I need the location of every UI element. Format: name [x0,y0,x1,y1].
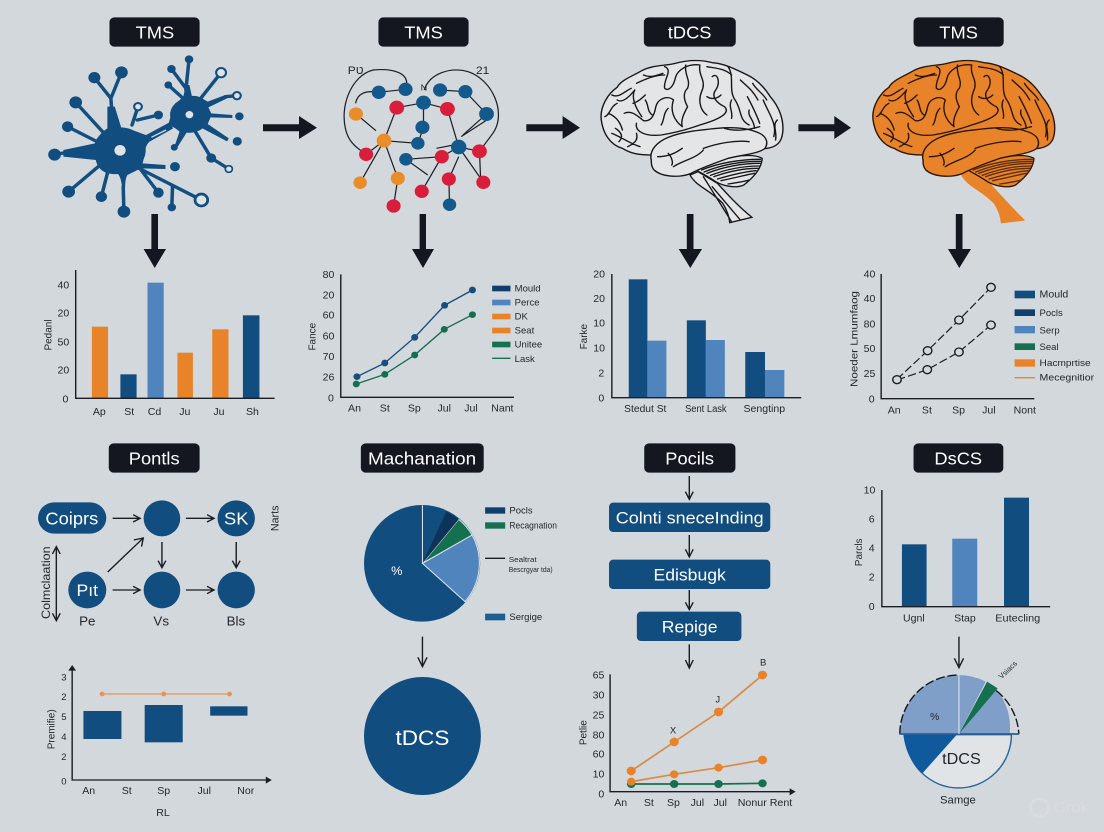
bar chart 6: 0 [869,602,875,613]
flow diagram: SK [224,509,249,529]
bar chart 3: Sengtinp [744,404,785,415]
line chart 4: Nont [1014,406,1036,416]
arrow: bars to pie [954,637,964,668]
flow diagram: Pe [79,614,95,628]
heading: TMS 2: TMS [404,23,443,43]
flow diagram [38,500,282,628]
bar chart 3: 20 [593,294,605,305]
bar chart 1: Ju [213,407,225,418]
arrow: right 1 [263,116,317,139]
chart: floating bars with line: 3 [61,673,67,683]
watermark: Grok: Grok [1054,800,1089,817]
line chart 4: St [922,406,932,416]
line chart 4: 50 [864,344,876,355]
chart: floating bars with line: Jul [197,786,211,797]
arrow: pie to circle [418,637,427,667]
line chart 2: 26 [323,373,335,384]
line chart 5: B [760,658,766,668]
bar chart 3: Farke [579,324,590,349]
line chart 5: Jul [714,798,727,809]
circle: tDCS: tDCS [396,726,449,750]
legend: Hacmprtise [1040,358,1091,368]
heading: Pontls [109,443,200,473]
arrow: down 2 [412,214,434,268]
flow: stacked boxes [609,476,770,668]
icon: orange brain [873,60,1055,223]
bar chart 1: St [124,407,134,418]
bar chart 1: 20 [58,309,70,320]
bar chart 6: Eutecling [995,614,1041,625]
pie chart: half segmented: % [930,712,939,723]
bar chart 3: 10 [593,319,605,330]
bar chart 6: Ugnl [903,614,925,625]
line chart 4: Noeder Lmumfaog [849,291,861,387]
line chart 2: 60 [323,311,335,322]
legend: Pocls [509,506,533,515]
line chart 2 [307,270,542,415]
line chart 4 [849,270,1094,416]
arrow: right 2 [526,116,580,139]
diagram: node network [344,64,498,213]
line chart 5: An [614,798,627,809]
bar chart 1: 20 [58,366,70,376]
line chart 5: 0 [598,790,605,800]
diagram: node network: Pט [348,64,364,77]
line chart 2: 60 [323,332,335,342]
heading: TMS 1: TMS [136,23,174,43]
line chart 5: 60 [593,750,605,761]
bar chart 3 [579,270,801,415]
line chart 5: J [715,695,720,704]
legend: Bescrgyar tda) [509,565,553,574]
line chart 5: Jul [691,798,704,809]
flow: stacked boxes: Edisbugk [653,565,726,585]
legend: Serp [1040,326,1060,335]
line chart 4: Jul [982,406,996,416]
legend: Sergige [509,612,542,622]
bar chart 1: Sh [246,407,259,418]
diagram: node network: Ν [421,83,427,93]
panel: middle left charts [43,270,542,418]
icon: neurons [48,55,244,218]
circle: tDCS [364,677,481,795]
bar chart 1: Pedanl [43,319,54,351]
legend: Mecegnitior [1040,373,1094,383]
line chart 5: 80 [593,731,605,741]
line chart 5: 10 [593,770,605,781]
legend: Unitee [515,340,542,349]
bar chart 1 [43,270,275,418]
pie chart: half segmented [899,659,1019,806]
legend: DK [515,312,529,321]
legend [492,284,542,364]
icon: outlined brain [601,60,783,223]
heading: DsCS [914,443,1003,473]
chart: floating bars with line: 5 [61,712,67,722]
bar chart 6 [854,486,1050,625]
heading: TMS 2 [378,17,469,47]
heading: Pocils: Pocils [665,449,714,469]
bar chart 6: 6 [869,515,875,525]
legend [1015,290,1094,383]
pie chart: half segmented: tDCS [942,751,981,768]
bar chart 3: Stedut St [624,404,667,415]
bar chart 1: 50 [58,338,70,348]
chart: floating bars with line: 2 [61,692,67,702]
bar chart 6: Stap [954,614,976,625]
bar chart 3: Sent Lask [685,404,727,415]
heading: TMS 3: TMS [939,23,978,43]
arrow: right 3 [798,116,851,139]
pie chart: half segmented: Samge [940,795,976,806]
line chart 2: 70 [323,352,335,363]
flow diagram: Bls [227,614,246,628]
legend: Lask [515,354,535,364]
line chart 4: 40 [864,270,876,280]
line chart 5: 30 [593,691,605,701]
panel: middle right charts [579,270,1094,416]
heading: Machanation: Machanation [368,449,476,469]
chart: floating bars with line: Sp [157,786,170,797]
bar chart 1: 0 [63,395,69,405]
bar chart 6: Parcls [854,538,865,566]
line chart 5: X [670,726,676,735]
bar chart 1: Ap [93,407,106,418]
line chart 5: Nonur Rent [738,798,792,809]
legend: Mould [515,284,541,293]
legend: Seat [515,326,535,335]
line chart 5 [578,658,796,809]
line chart 2: St [380,404,390,415]
line chart 4: 40 [864,294,876,305]
line chart 5: 65 [593,671,605,681]
line chart 5: 25 [593,711,605,721]
chart: floating bars with line: An [82,786,95,797]
bar chart 1: Cd [148,407,162,418]
bar chart 3: 10 [593,344,605,355]
chart: floating bars with line: Premifie) [46,709,58,749]
line chart 4: Sp [952,406,965,416]
pie chart [364,505,557,622]
flow diagram: Coiprs [45,509,98,529]
line chart 2: Jul [464,404,478,415]
line chart 2: An [348,404,361,415]
bar chart 3: 20 [593,270,605,280]
heading: TMS 3 [914,17,1004,47]
flow: stacked boxes: Colnti sneceInding [616,508,764,528]
flow diagram: Pıt [77,580,98,600]
line chart 5: Sp [667,798,680,809]
arrow: down 3 [679,214,702,268]
legend: Recagnation [509,521,557,531]
chart: floating bars with line: RL [156,808,170,819]
legend: Pocls [1040,308,1063,318]
flow diagram: Vs [153,614,170,628]
heading: Machanation [361,443,484,473]
panel: top left illustrations [48,17,498,218]
line chart 2: Nant [491,404,514,415]
heading: Pocils [644,443,735,473]
line chart 4: An [888,406,901,416]
bar chart 6: 10 [864,486,876,496]
line chart 4: 80 [864,320,876,330]
line chart 2: 0 [328,394,334,405]
chart: floating bars with line [46,665,272,819]
line chart 2: Fance [307,323,319,351]
legend: Perce [515,298,540,307]
bar chart 1: Ju [179,407,191,418]
chart: floating bars with line: St [122,786,132,797]
bar chart 3: 0 [598,394,605,405]
diagram: node network: 21 [476,64,489,77]
legend: Mould [1040,290,1069,301]
watermark: Grok [1030,799,1089,817]
flow: stacked boxes: Repige [662,617,718,637]
flow diagram: Colmclaation [40,546,53,619]
line chart 2: Sp [408,404,421,415]
legend: Sealtrat [509,555,537,564]
line chart 5: Petlie [578,720,590,745]
line chart 5: St [644,798,654,809]
legend: Seal [1040,342,1059,352]
bar chart 6: 4 [869,544,875,555]
heading: DsCS: DsCS [934,449,982,469]
pie chart: half segmented: Vsiacs [997,659,1019,681]
line chart 2: 80 [323,270,335,281]
chart: floating bars with line: 4 [61,732,67,742]
legend [485,506,557,622]
heading: TMS 1 [109,17,200,47]
chart: floating bars with line: 0 [61,777,67,786]
chart: floating bars with line: 2 [61,752,67,762]
heading: tDCS [644,17,736,47]
panel: top right brains [601,17,1055,223]
flow diagram: Narts [269,505,282,531]
panel: bottom right [578,443,1089,817]
chart: floating bars with line: Nor [237,786,255,797]
bar chart 1: 40 [58,281,70,291]
bar chart 3: 2 [598,369,605,380]
bar chart 6: 2 [869,573,875,584]
line chart 2: Jul [438,404,451,415]
heading: tDCS: tDCS [668,23,712,43]
arrow: down 1 [144,214,166,268]
line chart 4: 0 [869,395,875,406]
arrow: down 4 [948,214,971,268]
line chart 4: 25 [864,369,876,380]
heading: Pontls: Pontls [129,449,180,469]
pie chart: % [391,564,402,578]
line chart 2: 20 [323,291,335,301]
panel: bottom left [38,443,557,819]
